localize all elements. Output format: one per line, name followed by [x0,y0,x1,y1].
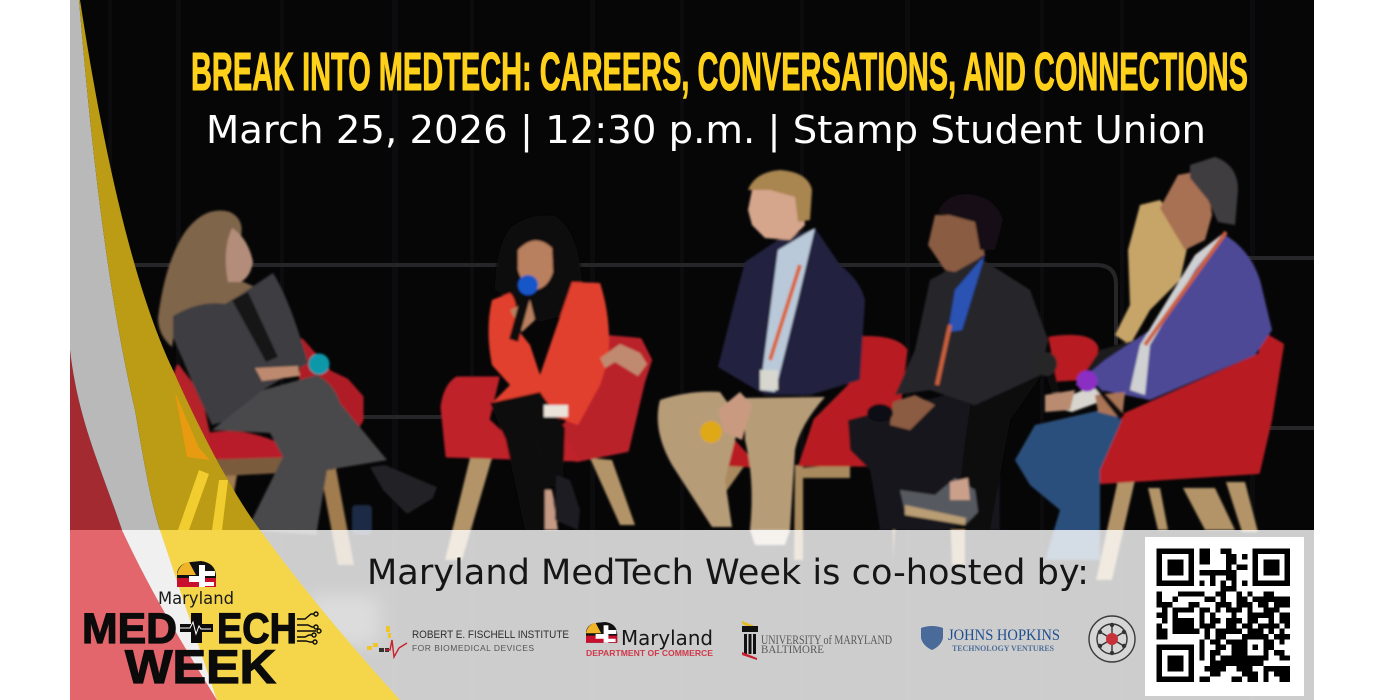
icon: Maryland flag arch small [586,622,617,643]
event date and place: March 25, 2026 | 12:30 p.m. | Stamp Student Union [206,108,1206,153]
icon: column [742,621,758,660]
chair: second panelist [442,337,650,560]
panelist: man in black suit [848,194,1048,530]
chair: third panelist [708,338,906,560]
logo: University of Maryland Baltimore: UNIVERSITY of MARYLAND [761,633,892,647]
icon: circuit traces [297,612,321,644]
logo: Fischell Institute: ROBERT E. FISCHELL INSTITUTE [412,629,569,641]
panelist: man in navy blazer [658,170,865,545]
logo: Maryland MedTech Week: ECH [217,605,297,653]
panelist: blonde woman behind [1035,200,1190,412]
logo: Maryland Department of Commerce [586,622,713,658]
chair: fourth panelist [893,336,1097,565]
bottom sponsor panel [70,530,1314,700]
microphone: blue [509,275,538,342]
logo: Maryland MedTech Week: WEEK [125,640,276,693]
logo: Maryland MedTech Week [82,561,321,693]
co-host heading: Maryland MedTech Week is co-hosted by: [367,553,1089,593]
chair: right panelist [1096,335,1282,580]
icon: pixel pulse [367,626,407,657]
panelist: woman in coral blazer [488,215,647,530]
chair: left moderator [173,340,362,565]
logo: round badge [1089,616,1135,662]
logo: Maryland MedTech Week: Maryland [158,589,234,609]
logo: University of Maryland Baltimore [742,621,892,660]
logo: Maryland MedTech Week: MED [82,605,177,653]
logo: Johns Hopkins Technology Ventures: JOHNS HOPKINS [948,627,1060,644]
panelist: man in purple blazer [1015,157,1272,560]
logo: Maryland Department of Commerce: Maryland [621,626,713,650]
microphone: yellow [700,421,722,443]
QR code [1145,537,1304,696]
panelist: left moderator in grey suit [158,211,437,535]
water bottle [352,505,372,535]
logo: Maryland Department of Commerce: DEPARTMENT OF COMMERCE [586,648,713,658]
microphone: teal [308,354,330,374]
logo: University of Maryland Baltimore: BALTIMORE [761,642,824,656]
logo: Fischell Institute: FOR BIOMEDICAL DEVICES [412,643,534,653]
decorative swoosh: state colours [70,0,400,700]
icon: medical cross with pulse [180,613,213,643]
icon: Maryland flag arch [177,561,216,587]
microphone: purple [1076,370,1125,420]
microphone: black [1040,352,1060,394]
logo: Johns Hopkins Technology Ventures: TECHNOLOGY VENTURES [952,644,1055,653]
logo: Johns Hopkins Technology Ventures [921,626,1060,653]
icon: shield [921,626,943,650]
logo: Fischell Institute [367,626,569,657]
